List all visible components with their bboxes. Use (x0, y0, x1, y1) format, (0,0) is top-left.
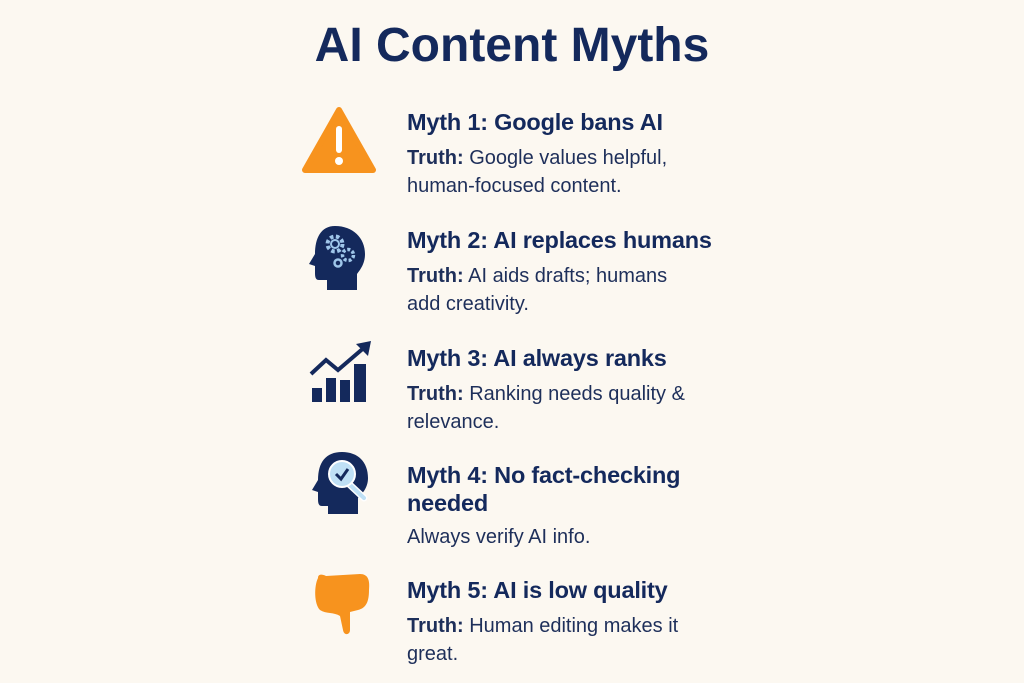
truth 3 (407, 383, 685, 433)
icon: growth chart (310, 341, 371, 402)
title: AI Content Myths (315, 19, 709, 72)
truth 5 (407, 615, 678, 665)
myth 2: Myth 2: AI replaces humans (407, 227, 712, 253)
myth 3: Myth 3: AI always ranks (407, 345, 667, 371)
myth 1: Myth 1: Google bans AI (407, 109, 663, 135)
myth 4: needed (407, 490, 488, 516)
myth 5: Myth 5: AI is low quality (407, 577, 668, 603)
truth 2: Truth: AI aids drafts; humans (407, 265, 667, 287)
truth 5: Truth: Human editing makes it (407, 615, 678, 637)
icon: head with magnifier (312, 452, 368, 514)
truth 4: Always verify AI info. (407, 526, 590, 548)
truth 1 (407, 147, 667, 197)
myth 4 (407, 462, 680, 516)
icon: warning (302, 107, 376, 173)
truth 1: Truth: Google values helpful, (407, 147, 667, 169)
truth 5: great. (407, 643, 458, 665)
truth 3: relevance. (407, 411, 499, 433)
myth 4: Myth 4: No fact-checking (407, 462, 680, 488)
truth 1: human-focused content. (407, 175, 622, 197)
icon: thumbs down (315, 574, 370, 634)
icon: head with gears (309, 226, 365, 290)
truth 2 (407, 265, 667, 315)
truth 3: Truth: Ranking needs quality & (407, 383, 685, 405)
truth 2: add creativity. (407, 293, 529, 315)
